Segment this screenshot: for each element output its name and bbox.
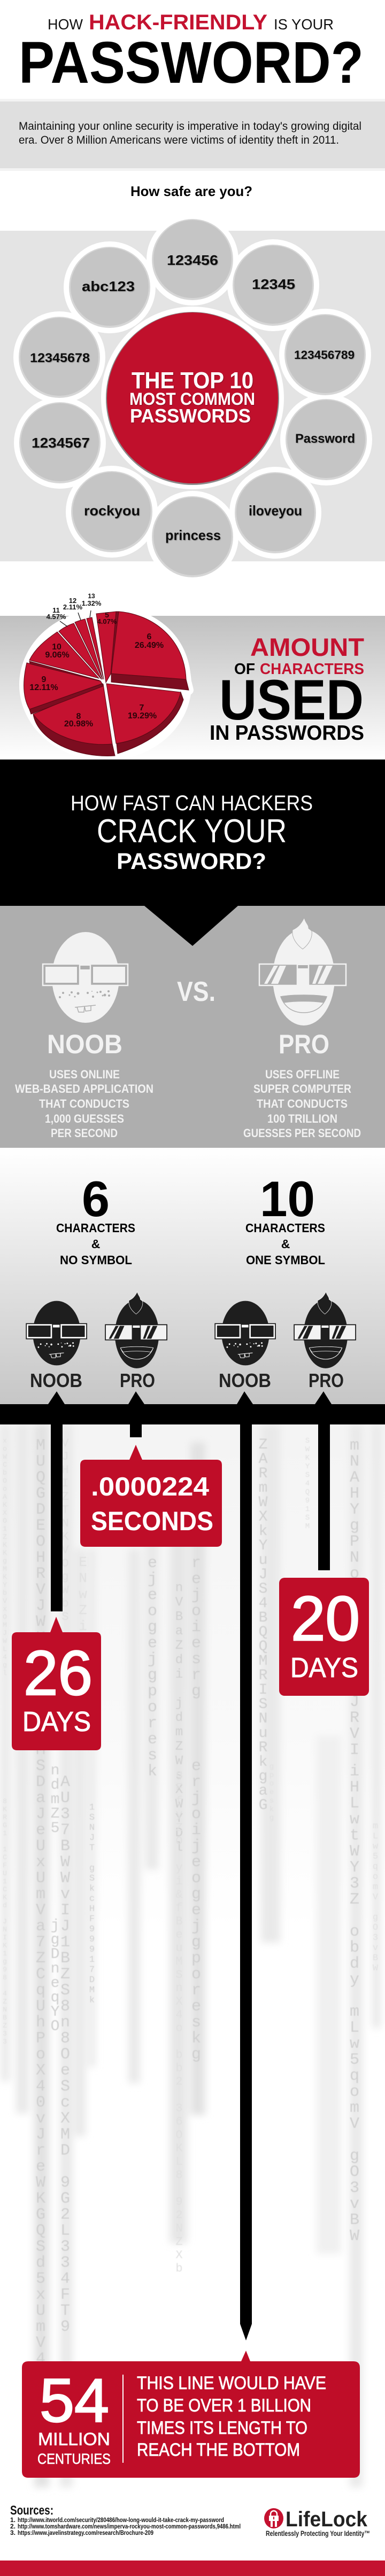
matrix letter columns: ejeogejgporesk — [143, 1554, 161, 1779]
pie chart labels: 8 — [76, 712, 81, 721]
noob heading: NOOB — [47, 1029, 122, 1059]
title line: how hack-friendly is your: HACK-FRIENDLY — [89, 11, 267, 34]
sources: 2. — [10, 2523, 16, 2530]
arrow: noob 10 characters — [240, 1424, 252, 2340]
bar: pro 6 characters — [130, 1424, 142, 1437]
matrix letter columns — [1, 1437, 381, 2414]
small hacker labels: NOOB — [30, 1369, 82, 1391]
pie chart halo — [24, 612, 189, 756]
callout message: TO BE OVER 1 BILLION — [137, 2395, 311, 2416]
intro text: era. Over 8 Million Americans were victims of identity theft in 2011. — [19, 134, 339, 146]
callout message — [137, 2373, 326, 2460]
callout text: DAYS — [22, 1706, 91, 1737]
password labels — [30, 252, 355, 543]
callout number — [37, 2367, 111, 2467]
sources: http://www.tomshardware.com/news/imperva-rockyou-most-common-passwords,9486.html — [18, 2523, 241, 2530]
pro description: GUESSES PER SECOND — [243, 1126, 361, 1140]
versus label: VS. — [177, 976, 215, 1007]
heading: amount of characters used in passwords: OF — [234, 661, 255, 678]
panel: top 10 passwords — [0, 214, 385, 583]
scenario: 6 characters no symbol: NO SYMBOL — [60, 1253, 132, 1267]
section heading: PASSWORD? — [117, 849, 266, 874]
bar: pro 10 characters — [318, 1424, 330, 1570]
noob description: PER SECOND — [51, 1126, 118, 1140]
centre disc text: MOST COMMON — [129, 389, 255, 409]
noob description: USES ONLINE — [49, 1068, 120, 1081]
pie chart labels: 6 — [147, 632, 152, 641]
small hacker labels: NOOB — [219, 1369, 271, 1391]
matrix letter columns: ndmZ5 — [47, 1763, 63, 1835]
scenario: 6 characters no symbol: & — [91, 1237, 100, 1251]
icon: pro face — [259, 918, 346, 1025]
pie chart labels: 19.29% — [128, 711, 157, 721]
pie chart labels: 20.98% — [64, 719, 93, 729]
centre disc text: THE TOP 10 — [132, 367, 253, 394]
matrix letter columns: ENwZiSjNOSj — [75, 1554, 91, 1731]
matrix letter columns: erjoijeogejgporeskg — [187, 1757, 205, 2062]
password labels: princess — [165, 527, 221, 543]
pie chart labels: 26.49% — [135, 641, 164, 650]
matrix letter columns: VJHIZTNKVOgWbS — [59, 1437, 72, 1624]
heading: amount of characters used in passwords: USED — [219, 668, 364, 732]
icon: lock badge — [264, 2508, 283, 2528]
pro description: THAT CONDUCTS — [257, 1097, 348, 1110]
password labels: abc123 — [82, 278, 135, 294]
sources: Sources: — [10, 2503, 53, 2518]
section heading: HOW FAST CAN HACKERS — [71, 792, 313, 815]
pie chart labels: 11 — [52, 606, 60, 614]
callout message: TIMES ITS LENGTH TO — [137, 2418, 307, 2438]
marker triangles — [48, 1391, 332, 1404]
noob description: 1,000 GUESSES — [45, 1112, 124, 1125]
centre disc text: PASSWORDS — [130, 405, 251, 427]
callout number: MILLION — [38, 2429, 110, 2449]
panel: noob versus pro — [0, 903, 385, 1148]
bar: noob 6 characters — [51, 1424, 63, 1611]
callout message: THIS LINE WOULD HAVE — [137, 2373, 326, 2393]
pie chart — [24, 610, 189, 756]
callout text: DAYS — [290, 1653, 358, 1684]
callout text: 20 — [291, 1584, 360, 1654]
pie chart labels — [29, 592, 164, 729]
callout text: .0000224 — [91, 1473, 209, 1501]
pie chart labels: 5 — [105, 610, 109, 619]
pie chart labels: 9.06% — [45, 651, 70, 660]
matrix letter columns: SWKYS4Q91SM — [303, 1437, 312, 1531]
noob description: THAT CONDUCTS — [39, 1097, 129, 1110]
matrix letter columns: iHLwtWY3Z obdy mLw5qomV gO3vBW — [345, 1763, 364, 2243]
pro heading: PRO — [279, 1029, 329, 1059]
sources: 3. — [10, 2529, 16, 2536]
scenario: 10 characters one symbol: ONE SYMBOL — [246, 1253, 325, 1267]
callout: 54 million centuries — [22, 2351, 360, 2478]
scenario: 6 characters no symbol: CHARACTERS — [56, 1221, 135, 1235]
callout number: 54 — [40, 2367, 109, 2435]
panel: amount of characters — [0, 592, 385, 760]
title line: how hack-friendly is your: IS YOUR — [274, 16, 334, 33]
white rings — [13, 214, 372, 583]
intro text: Maintaining your online security is imperative in today's growing digital — [19, 120, 361, 132]
sources: https://www.javelinstrategy.com/research/Brochure-209 — [18, 2529, 153, 2536]
scenario: 10 characters one symbol — [245, 1171, 325, 1267]
matrix letter columns: 8KRG1 1CFU1CKd JNIK1g98 4ZNBZ33 — [1, 1797, 9, 2046]
noob description: WEB-BASED APPLICATION — [15, 1082, 153, 1095]
background: falling password characters — [0, 1424, 385, 2487]
password labels: 12345 — [252, 276, 295, 292]
heading: how safe are you: How safe are you? — [130, 183, 252, 199]
intro panel — [0, 99, 385, 171]
password labels: 123456 — [167, 252, 218, 268]
icon: noob face — [43, 932, 128, 1023]
soft vertical streaks — [1, 1424, 381, 2487]
pie chart labels: 4.07% — [97, 617, 117, 625]
callout text — [290, 1584, 360, 1684]
header title — [19, 11, 364, 96]
small hacker labels — [30, 1369, 344, 1391]
timeline bar — [0, 1391, 385, 1424]
red centre disc — [106, 312, 279, 485]
logo: lifelock — [264, 2508, 370, 2538]
matrix letter columns: jgDneqYO — [47, 1917, 63, 2033]
callout text: 26 — [24, 1638, 93, 1709]
pie chart labels: 1.32% — [82, 599, 102, 607]
password labels: 1234567 — [32, 435, 90, 451]
matrix letter columns: xoWCbOoAKXO1ZKKgMKYbVxOMJWL4gl — [1, 1437, 9, 1677]
heading: amount of characters used in passwords: IN PASSWORDS — [210, 722, 364, 745]
sources: 1. — [10, 2516, 16, 2524]
pie chart labels: 10 — [52, 643, 61, 652]
callout text — [91, 1473, 213, 1536]
password labels: iloveyou — [249, 503, 302, 519]
pie chart labels: 2.11% — [63, 603, 83, 611]
icon: small pro face left — [105, 1291, 167, 1368]
callout: 26 days — [12, 1617, 101, 1750]
pie chart labels: 12.11% — [29, 683, 58, 692]
footer band — [0, 2561, 385, 2576]
section heading: CRACK YOUR — [97, 813, 287, 850]
scenario: 10 characters one symbol: CHARACTERS — [245, 1221, 325, 1235]
callout message: REACH THE BOTTOM — [137, 2440, 300, 2460]
section heading — [71, 792, 313, 874]
scenario: 6 characters no symbol — [56, 1171, 135, 1267]
icon: small noob face left — [26, 1301, 87, 1365]
sources — [10, 2503, 241, 2536]
noob description — [15, 1068, 153, 1140]
scenario: 10 characters one symbol: & — [281, 1237, 290, 1251]
password labels: 123456789 — [294, 348, 355, 362]
pro description: 100 TRILLION — [267, 1112, 337, 1125]
pie chart labels: 13 — [88, 592, 95, 600]
matrix letter columns: mNAHYgPNoKMIoBWbJRVI — [345, 1437, 364, 1757]
sources: http://www.itworld.com/security/280486/how-long-would-it-take-crack-my-password — [18, 2516, 224, 2524]
scenario: 6 characters no symbol: 6 — [82, 1171, 110, 1227]
pie chart labels: 4.57% — [47, 613, 66, 621]
pie chart labels: 9 — [42, 675, 47, 684]
wordmark: LifeLock — [286, 2508, 368, 2531]
panel: password scenarios — [0, 1148, 385, 1404]
heading: amount of characters used in passwords — [210, 633, 364, 745]
heading: amount of characters used in passwords: AMOUNT — [250, 633, 364, 661]
pro description: USES OFFLINE — [265, 1068, 340, 1081]
matrix letter columns: nVBaZdi jdmZWsXWYDl — [172, 1581, 186, 1855]
callout text: SECONDS — [91, 1506, 213, 1536]
password labels: Password — [295, 432, 355, 446]
pro description: SUPER COMPUTER — [253, 1082, 351, 1095]
matrix letter columns: mLw5qomV gO3vBW — [370, 1821, 381, 1974]
title line: how hack-friendly is your: HOW — [48, 16, 83, 33]
callout text — [22, 1638, 93, 1737]
pro description — [243, 1068, 361, 1140]
matrix letter columns: MUQGDEOHRVJWKSOFMGdMSDaJeUxUmVa7ZCqUhPoX40vJreWKGQSd5xUmV47Zc — [32, 1437, 50, 2414]
matrix letter columns: gpoeskg — [267, 1763, 276, 1822]
centre disc text — [129, 367, 255, 427]
title line: how hack-friendly is your — [48, 11, 334, 34]
panel: how fast can hackers crack your password — [0, 760, 385, 946]
matrix letter columns: 1SNJT gSkcHF99917DMk — [87, 1803, 97, 2006]
scenario: 10 characters one symbol: 10 — [260, 1171, 315, 1227]
matrix letter columns: AU37BWWvIJ1BZS8n8OeScXMD 9G2L334FT9 — [56, 1773, 74, 2334]
icon: small noob face right — [215, 1301, 275, 1365]
small hacker labels: PRO — [309, 1369, 344, 1391]
heading: amount of characters used in passwords: CHARACTERS — [260, 661, 364, 678]
icon: small pro face right — [294, 1291, 356, 1368]
matrix letter columns: gFfyZO yi&fBeuMSnX4o bb2 36OKL8 92NZXb — [172, 1768, 186, 2275]
grey discs — [19, 219, 367, 577]
intro text — [19, 120, 361, 146]
pie chart labels: 7 — [140, 703, 144, 712]
password labels: rockyou — [84, 503, 140, 519]
callout: .0000224 seconds — [80, 1445, 222, 1547]
callout: 20 days — [279, 1578, 369, 1696]
matrix letter columns: ZARmWXkYuJS4BQQMRISNuRkgaG — [255, 1437, 272, 1812]
matrix letter columns: rejoiesrg — [187, 1554, 205, 1698]
callout number: CENTURIES — [37, 2450, 111, 2467]
small hacker labels: PRO — [120, 1369, 155, 1391]
pie chart labels: 12 — [69, 597, 76, 605]
password labels: 12345678 — [30, 351, 90, 365]
